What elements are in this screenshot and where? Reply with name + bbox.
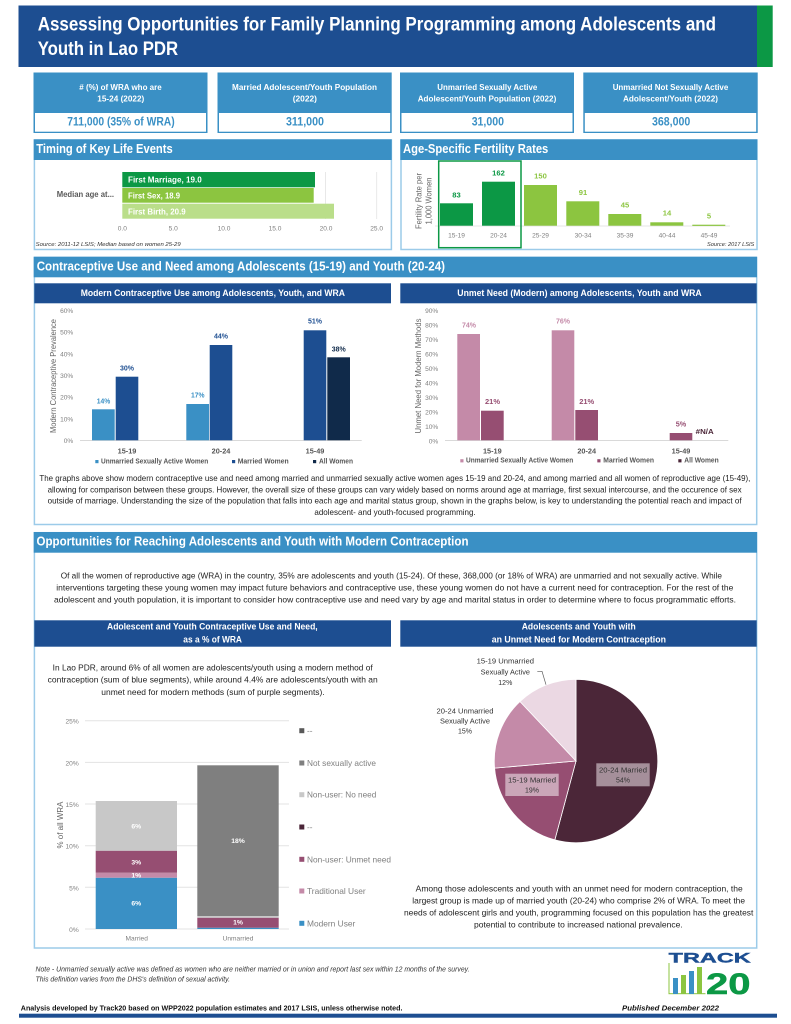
stat card: married population [218, 72, 392, 133]
legend: modern use: All Women [319, 459, 353, 466]
chart: stacked bars: % of all WRA [56, 801, 65, 848]
chart: stacked bars: 20% [65, 760, 79, 767]
legend: stacked bars: Non-user: Unmet need [307, 854, 391, 864]
text block: graph explanation: allowing for comparison between these groups. However, the overall size of these groups can vary widely based on norms around age at marriage, first sexual intercourse, and the occurence of sex [48, 484, 742, 494]
chart: modern contraceptive use [34, 283, 391, 466]
pie label: 15-19 unmarried sexually active [477, 657, 546, 687]
highlight box: ages 15-24 [439, 161, 521, 248]
legend: stacked bars: -- [307, 822, 313, 832]
bar: unmarried [197, 765, 279, 929]
pie label: 20-24 married: 20-24 Married [599, 766, 647, 775]
legend: modern use [95, 459, 353, 466]
chart: modern contraceptive use: Modern Contraceptive Prevalence [49, 318, 58, 433]
chart: median age bars: 15.0 [269, 226, 282, 232]
chart: fertility bars: 20-24 [490, 232, 507, 239]
chart: pie [436, 657, 658, 843]
title banner [18, 6, 773, 67]
chart: unmet need: 74% [462, 321, 476, 330]
text block: pie summary: potential to contribute to increased national prevalence. [474, 920, 683, 930]
logo: Track20 [668, 949, 751, 1001]
stat card: unmarried not sexually active [583, 72, 758, 133]
bar: married: 3% [131, 859, 141, 866]
legend: stacked bars: Traditional User [307, 886, 366, 896]
chart: stacked bars: 5% [69, 885, 79, 892]
stat card: WRA aged 15-24: 15-24 (2022) [97, 94, 144, 104]
chart: unmet need: 20-24 [577, 446, 597, 455]
text block: opportunities intro: adolescent and youth population, it is important to consider how contraceptive use and need vary by age and marital status in order to determine where to focus programmatic efforts. [54, 595, 736, 605]
chart: unmet need: Unmet Need (Modern) among Adolescents, Youth and WRA [457, 288, 702, 298]
chart: unmet need: 76% [556, 317, 570, 326]
stat card: WRA aged 15-24 [34, 72, 208, 133]
chart: unmet need: 40% [425, 380, 438, 387]
bar: married: 6% [131, 823, 141, 830]
chart: fertility bars: 5 [707, 212, 712, 221]
chart: unmet need: 10% [425, 424, 438, 431]
chart: fertility bars [415, 168, 730, 239]
chart: median age bars: First Birth, 20.9 [128, 207, 186, 216]
logo: Track20: TRACK [669, 949, 751, 965]
chart: fertility bars: Fertility Rate per [415, 173, 424, 229]
chart: median age bars: 0.0 [118, 226, 127, 232]
chart: median age bars: 20.0 [320, 226, 333, 232]
chart: fertility bars: 1,000 Women [425, 178, 434, 224]
footer: analysis credit: Analysis developed by Track20 based on WPP2022 population estimates and 2017 LSIS, unless otherwise noted. [21, 1003, 403, 1012]
stat card: unmarried not sexually active: 368,000 [652, 114, 691, 128]
panel: age-specific fertility rates [400, 139, 757, 250]
chart: modern contraceptive use: 15-19 [118, 446, 136, 455]
chart: modern contraceptive use: 10% [60, 416, 73, 423]
chart: unmet need: 5% [676, 420, 686, 429]
chart: fertility bars: 25-29 [532, 232, 549, 239]
chart: modern contraceptive use: 50% [60, 330, 73, 337]
chart: modern contraceptive use: 30% [60, 373, 73, 380]
stat card: married population: (2022) [293, 94, 317, 104]
chart: unmet need: 90% [425, 308, 438, 315]
stat card: unmarried not sexually active: Unmarried Not Sexually Active [613, 82, 729, 92]
chart: modern contraceptive use: 17% [191, 391, 205, 400]
chart: unmet need: 21% [579, 397, 594, 406]
chart: fertility bars: 45 [621, 200, 630, 209]
title banner: Youth in Lao PDR [38, 38, 178, 60]
chart: fertility bars: 83 [452, 190, 461, 199]
stat card: unmarried sexually active: 31,000 [472, 114, 504, 128]
text block: pie summary: needs of adolescent girls and youth, programming focused on this population has the greatest [404, 908, 754, 918]
note on definitions: Note - Unmarried sexually active was defined as women who are neither married or in union and report last sex within 12 months of the survey. [36, 967, 470, 974]
pie label: 20-24 married [596, 763, 650, 786]
legend: modern use: Unmarried Sexually Active Women [101, 459, 208, 466]
pie label: 20-24 unmarried sexually active [436, 707, 494, 736]
chart: stacked bars: 0% [69, 927, 79, 934]
panel: timing of key life events [34, 139, 392, 250]
chart: median age bars: 5.0 [169, 226, 178, 232]
chart: modern contraceptive use: 20-24 [212, 446, 231, 455]
stat card: unmarried sexually active: Unmarried Sexually Active [437, 82, 538, 92]
chart: modern contraceptive use: 60% [60, 308, 73, 315]
pie label: 15-19 unmarried sexually active: Sexually Active [481, 667, 530, 676]
text block: graph explanation: adolescent- and youth-focused programming. [314, 507, 476, 517]
pie label: 15-19 unmarried sexually active: 12% [498, 678, 513, 687]
chart: stacked bars: 25% [65, 719, 79, 726]
stat card: married population: Married Adolescent/Youth Population [232, 82, 377, 92]
chart: modern contraceptive use: 30% [120, 364, 134, 373]
legend: modern use: Married Women [238, 459, 289, 466]
chart: unmet need: 70% [425, 337, 438, 344]
logo: Track20: 20 [706, 968, 750, 1001]
stat card: unmarried not sexually active: Adolescent/Youth (2022) [623, 94, 718, 104]
chart: fertility bars: 40-44 [659, 232, 676, 239]
text block: pie summary [404, 883, 754, 930]
chart: stacked bars: Unmarried [223, 935, 254, 942]
legend: stacked bars: -- [307, 726, 313, 736]
chart: unmet need: 21% [485, 397, 500, 406]
pie label: 20-24 unmarried sexually active: 15% [458, 727, 472, 736]
chart: unmet need: 20% [425, 409, 438, 416]
stat card: married population: 311,000 [286, 114, 324, 128]
text block: stacked chart summary [48, 663, 378, 697]
chart: median age bars: 25.0 [370, 226, 383, 232]
chart: unmet need: 15-49 [672, 446, 690, 455]
sub-panel: unmet need pie [400, 620, 757, 930]
chart: modern contraceptive use: 14% [97, 396, 110, 405]
chart: fertility bars: 91 [579, 188, 588, 197]
chart: fertility bars: 30-34 [575, 232, 592, 239]
text block: stacked chart summary: contraception (sum of blue segments), while around 4.4% are adolescents/youth with an [48, 675, 378, 685]
pie label: 15-19 married [505, 774, 559, 796]
note on definitions [36, 967, 470, 983]
legend: unmet need: Unmarried Sexually Active Women [466, 458, 573, 465]
text block: pie summary: largest group is made up of married youth (20-24) who comprise 2% of WRA. To meet the [412, 895, 745, 905]
stat card: WRA aged 15-24: 711,000 (35% of WRA) [67, 114, 175, 128]
chart: fertility bars: 162 [492, 168, 505, 177]
chart: stacked bars: 15% [65, 802, 79, 809]
chart: fertility bars: 14 [663, 209, 672, 218]
footer rule [19, 1014, 777, 1018]
legend: stacked bars: Modern User [307, 918, 356, 928]
bar: unmarried: 18% [231, 838, 245, 845]
panel: age-specific fertility rates: Age-Specific Fertility Rates [403, 141, 548, 156]
chart: stacked bars [56, 719, 391, 942]
chart: median age bars: First Sex, 18.9 [128, 191, 181, 200]
panel: timing of key life events: Timing of Key Life Events [36, 141, 173, 156]
legend: stacked bars: Non-user: No need [307, 790, 377, 800]
pie label: 20-24 married: 54% [616, 775, 630, 784]
chart: median age bars: First Marriage, 19.0 [128, 175, 202, 184]
chart: unmet need [400, 283, 757, 465]
chart: fertility bars: 15-19 [448, 232, 465, 239]
text block: graph explanation [39, 473, 750, 517]
sub-panel: unmet need pie: Adolescents and Youth with [522, 622, 636, 632]
bar: married [96, 801, 177, 929]
text block: pie summary: Among those adolescents and youth with an unmet need for modern contraception, the [416, 883, 743, 893]
chart: median age bars [57, 172, 383, 232]
source note: Source: 2017 LSIS [707, 242, 755, 248]
chart: unmet need: #N/A [696, 427, 714, 436]
chart: modern contraceptive use: 15-49 [306, 446, 324, 455]
pie label: 15-19 married: 19% [525, 786, 539, 795]
chart: unmet need: 30% [425, 395, 438, 402]
chart: modern contraceptive use: 51% [308, 317, 322, 326]
chart: fertility bars: 150 [534, 171, 547, 180]
legend: stacked bars [299, 726, 391, 928]
stat card: unmarried sexually active [400, 72, 574, 133]
bar: married: 6% [131, 900, 141, 907]
text block: graph explanation: The graphs above show modern contraceptive use and need among married and unmarried sexually active women ages 15-19 and 20-24, and among married and all women of reproductive age (15-49), [39, 473, 750, 483]
chart: modern contraceptive use: 44% [214, 332, 228, 341]
panel: opportunities for reaching adolescents and youth: Opportunities for Reaching Adolescents and Youth with Modern Contraception [36, 534, 469, 549]
text block: opportunities intro [54, 571, 736, 605]
chart: modern contraceptive use: 40% [60, 351, 73, 358]
sub-panel: use and need as a percent of WRA: as a % of WRA [183, 635, 242, 645]
source note: Source: 2011-12 LSIS; Median based on women 25-29 [36, 242, 181, 248]
chart: unmet need: 50% [425, 366, 438, 373]
chart: modern contraceptive use: Modern Contraceptive Use among Adolescents, Youth, and WRA [81, 288, 345, 298]
chart: modern contraceptive use: 38% [332, 344, 346, 353]
pie label: 15-19 unmarried sexually active: 15-19 Unmarried [477, 657, 534, 666]
sub-panel: use and need as a percent of WRA: Adolescent and Youth Contraceptive Use and Need, [107, 622, 318, 632]
bar: married: 1% [131, 873, 141, 880]
sub-panel: use and need as a percent of WRA [34, 620, 391, 942]
chart: unmet need: Unmet Need for Modern Methods [414, 318, 423, 434]
note on definitions: This definition varies from the DHS's definition of sexual activity. [36, 976, 230, 983]
text block: stacked chart summary: unmet need for modern methods (sum of purple segments). [101, 687, 325, 697]
pie label: 20-24 unmarried sexually active: 20-24 Unmarried [436, 707, 494, 716]
text block: opportunities intro: Of all the women of reproductive age (WRA) in the country, 35% are adolescents and youth (15-24). Of these, 368,000 (or 18% of WRA) are unmarried and not sexually active. While [61, 571, 722, 581]
pie label: 20-24 unmarried sexually active: Sexually Active [440, 716, 490, 725]
legend: unmet need: Married Women [603, 458, 654, 465]
legend: unmet need: All Women [684, 458, 719, 465]
chart: unmet need: 15-19 [483, 446, 502, 455]
bar: unmarried: 1% [233, 920, 243, 927]
panel: contraceptive use and need [34, 257, 757, 524]
text block: opportunities intro: interventions targeting these young women may impact future behaviors and contraceptive use, these young women do not have a current need for contraception. For the rest of the [56, 583, 734, 593]
text block: graph explanation: outside of marriage. Understanding the size of the population that falls into each age and marital status group, shown in the graphs below, is key to understanding the potential reach and impact of [48, 496, 742, 506]
legend: unmet need [460, 458, 719, 465]
stat card: unmarried sexually active: Adolescent/Youth Population (2022) [418, 94, 556, 104]
chart: unmet need: 80% [425, 322, 438, 330]
chart: stacked bars: Married [126, 935, 148, 942]
chart: unmet need: 0% [429, 438, 438, 445]
chart: modern contraceptive use: 0% [64, 438, 73, 445]
panel: opportunities for reaching adolescents and youth [34, 532, 757, 948]
chart: median age bars: Median age at... [57, 190, 114, 199]
footer: publication date: Published December 2022 [622, 1003, 720, 1012]
panel: contraceptive use and need: Contraceptive Use and Need among Adolescents (15-19) and Youth (20-24) [37, 259, 445, 274]
chart: median age bars: 10.0 [218, 226, 231, 232]
stat card: WRA aged 15-24: # (%) of WRA who are [79, 82, 162, 92]
chart: fertility bars: 35-39 [617, 232, 634, 239]
text block: stacked chart summary: In Lao PDR, around 6% of all women are adolescents/youth using a modern method of [53, 663, 373, 673]
chart: unmet need: 60% [425, 352, 438, 358]
chart: fertility bars: 45-49 [701, 232, 718, 239]
chart: modern contraceptive use: 20% [60, 395, 73, 402]
pie label: 15-19 married: 15-19 Married [508, 776, 556, 785]
legend: stacked bars: Not sexually active [307, 758, 376, 768]
chart: stacked bars: 10% [65, 844, 79, 851]
sub-panel: unmet need pie: an Unmet Need for Modern Contraception [492, 635, 666, 645]
